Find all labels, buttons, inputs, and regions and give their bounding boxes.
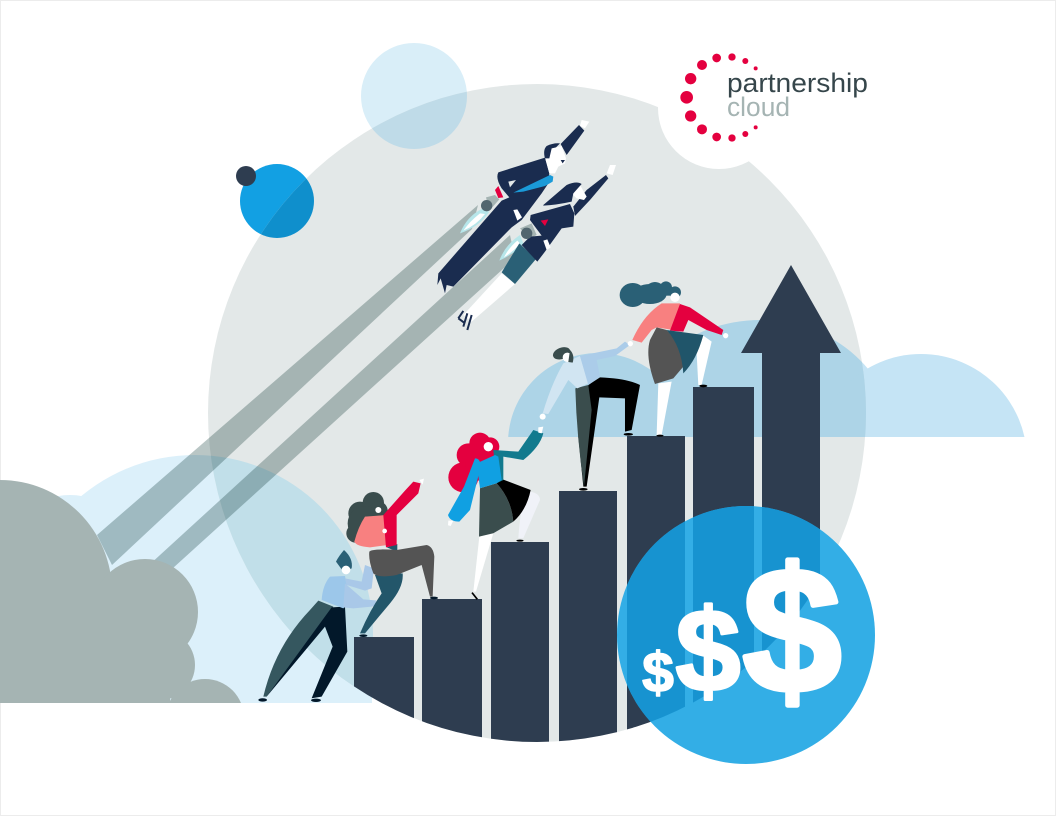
- logo wordmark: partnership: [727, 68, 868, 98]
- bars seen through coin: [627, 506, 820, 722]
- dollar signs: $: [675, 585, 741, 716]
- figure: man helping: [540, 342, 640, 491]
- cloud: left pale blue: [58, 455, 372, 703]
- dollar signs: [642, 531, 842, 730]
- logo dots: [680, 53, 758, 142]
- bar chart with arrow: [354, 265, 841, 762]
- dollar signs: $: [742, 531, 842, 730]
- coin: blue circle: [617, 506, 875, 764]
- rocket trails: [97, 205, 515, 578]
- circle: small blue planet: [240, 164, 314, 238]
- figure: pushing person: [258, 550, 381, 702]
- logo wordmark: [727, 68, 868, 122]
- figure: climber with red hair: [448, 427, 543, 599]
- cloud: right pale blue: [862, 354, 1024, 437]
- dollar signs: $: [642, 641, 674, 705]
- planet dot: [236, 166, 256, 186]
- cloud overlaps inside circle: [66, 73, 875, 764]
- logo notch: [658, 47, 780, 169]
- figure: climber with dark curly hair: [346, 479, 438, 637]
- figure: flying businessman: [437, 120, 589, 293]
- figure: top woman: [620, 281, 728, 437]
- large grey background circle: [208, 84, 866, 742]
- logo: partnership cloud: [680, 53, 868, 142]
- circle: top pale blue: [361, 43, 467, 149]
- logo wordmark: cloud: [727, 92, 790, 122]
- cloud: grey: [0, 480, 241, 703]
- figure: flying businesswoman: [458, 165, 616, 330]
